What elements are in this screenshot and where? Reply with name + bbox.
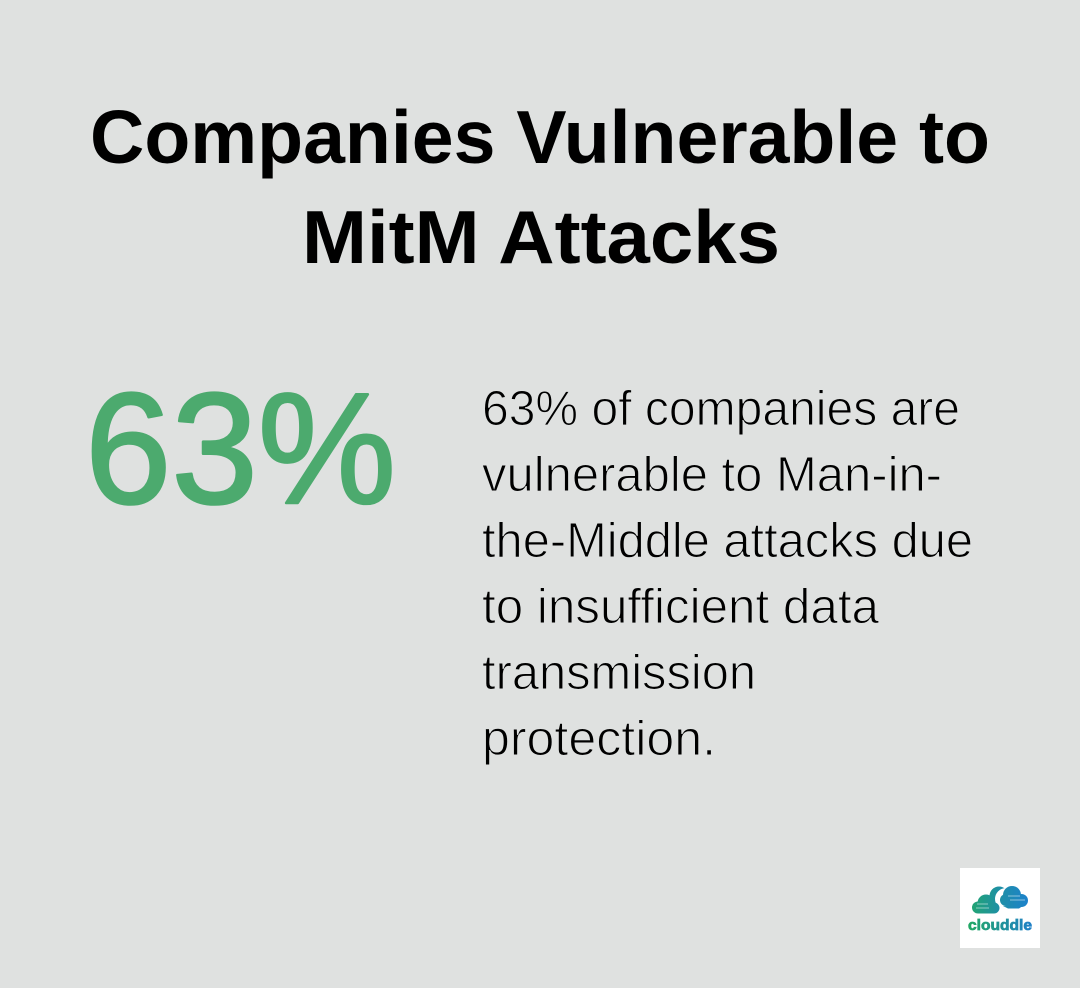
icon: right cloud: [1000, 886, 1028, 908]
description text: [482, 382, 973, 766]
icon: left cloud: [972, 894, 1000, 914]
title: Companies Vulnerable to: [90, 95, 990, 179]
description text: the-Middle attacks due: [482, 514, 973, 568]
big statistic: 63%: 63%: [85, 361, 396, 537]
description text: to insufficient data: [482, 580, 880, 634]
description text: 63% of companies are: [482, 382, 960, 436]
title: [90, 95, 990, 279]
description text: vulnerable to Man-in-: [482, 448, 942, 502]
title: MitM Attacks: [302, 195, 780, 279]
icon: centre cloud crescent: [990, 886, 1017, 910]
description text: protection.: [482, 712, 716, 766]
logo wordmark: clouddle: [968, 917, 1032, 934]
logo: clouddle: [960, 868, 1040, 948]
description text: transmission: [482, 646, 756, 700]
